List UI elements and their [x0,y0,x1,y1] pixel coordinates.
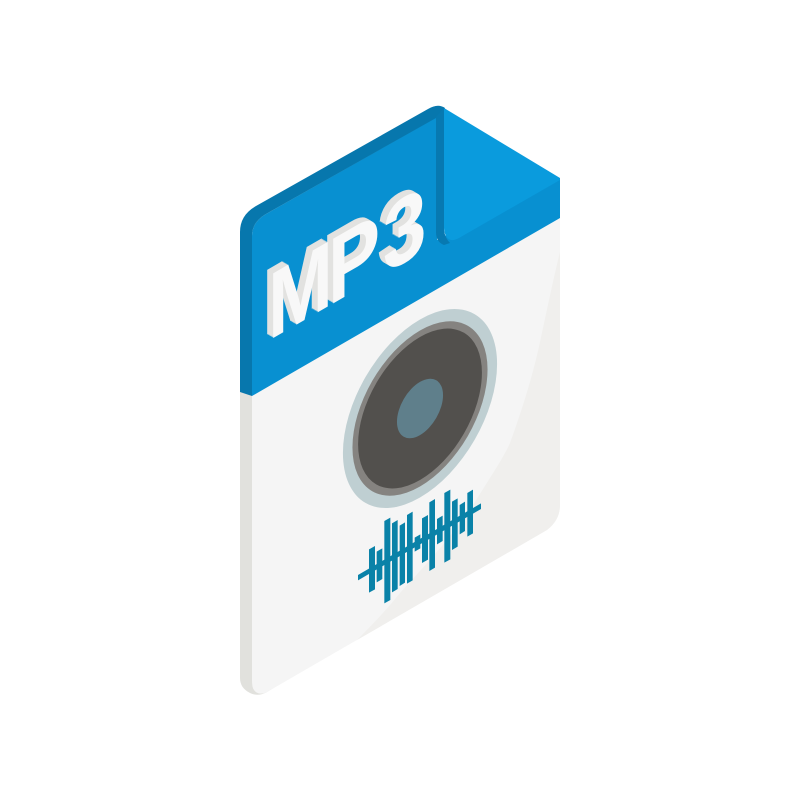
MP3 label: MP3 [262,161,420,358]
MP3 label: MP3 [265,163,423,360]
header front face [252,117,560,396]
MP3 label: MP3 [266,164,424,360]
header left and top edge [240,106,445,396]
MP3 label: MP3 [267,164,425,361]
left side edge [240,385,300,695]
fold shadow [436,108,450,245]
speaker grey ring [352,292,488,526]
MP3 label: MP3 [263,162,421,358]
MP3 label: MP3 [268,165,426,361]
speaker center cap [397,369,443,448]
speaker [343,275,497,542]
flap [444,108,560,240]
MP3 label: MP3 [264,162,422,359]
speaker cone [358,301,482,516]
sound waveform [358,490,481,603]
speaker outer rim [343,275,497,542]
front face [252,210,560,694]
folded corner flap [436,108,560,245]
file body [240,210,560,695]
blue header band [240,106,560,396]
page curl shading [345,252,560,647]
